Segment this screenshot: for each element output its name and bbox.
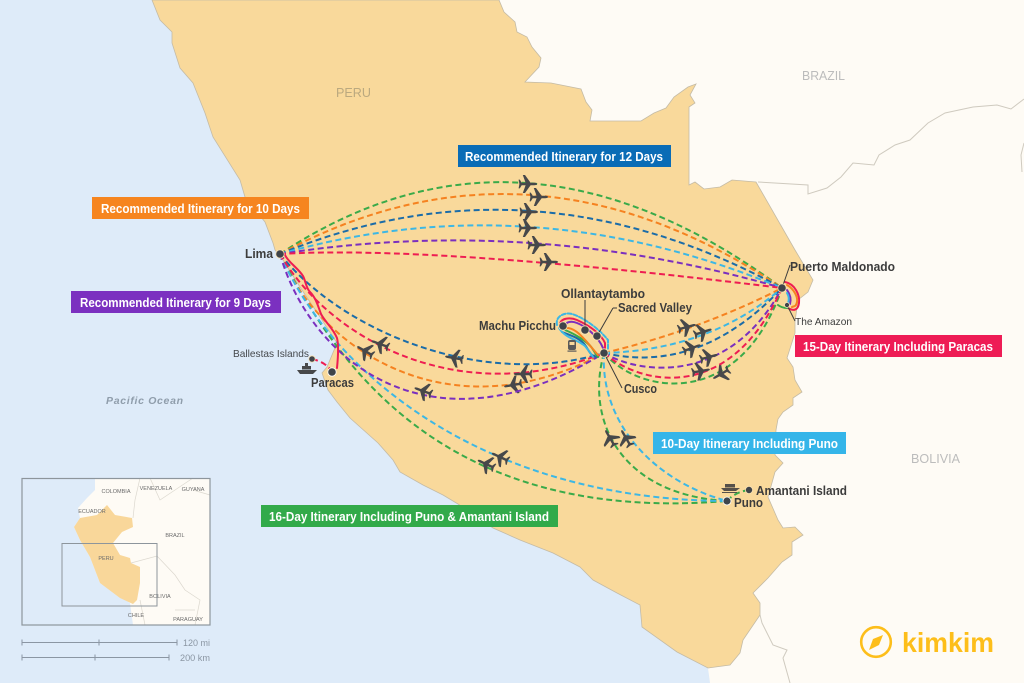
marker: Ollantaytambo: [581, 326, 589, 334]
scale bars: 200 km: [180, 653, 210, 664]
leader lines: [585, 265, 795, 388]
map markers: [276, 250, 790, 505]
legend tag: 15-Day Paracas: [795, 335, 1002, 357]
route: 9 Days (purple): [280, 236, 782, 403]
place: Paracas: Paracas: [311, 376, 354, 390]
scale bars: 120 mi: [183, 638, 210, 649]
legend tag: 10 Days: [92, 197, 309, 219]
route: 12 Days (dark blue): [280, 203, 782, 368]
inset locator map: BOLIVIA: [149, 594, 171, 600]
icon: boat near Amantani: [721, 484, 740, 493]
place labels: [233, 247, 895, 510]
marker: Ballestas Islands: [309, 356, 315, 362]
marker: Lima: [276, 250, 284, 258]
inset locator map: CHILE: [128, 613, 144, 619]
inset locator map: GUYANA: [182, 487, 205, 493]
place: Machu Picchu: Machu Picchu: [479, 319, 556, 333]
legend tag: 10-Day Puno: 10-Day Itinerary Including Puno: [661, 437, 838, 451]
icon: planes: [368, 253, 711, 383]
marker: Sacred Valley: [593, 332, 601, 340]
route: 15-Day including Paracas (red): [280, 252, 782, 383]
label: Pacific Ocean: Pacific Ocean: [106, 395, 183, 407]
legend tag: 16-Day Puno and Amantani: 16-Day Itinerary Including Puno & Amantani Island: [269, 510, 549, 524]
logo: kimkim: kimkim: [902, 627, 994, 658]
place: Lima: Lima: [245, 247, 274, 261]
icon: planes: [353, 188, 698, 395]
inset locator map: PARAGUAY: [173, 617, 203, 623]
logo: kimkim: [861, 627, 994, 658]
marker: Paracas: [328, 368, 336, 376]
overland bundle: Puerto Maldonado to The Amazon: [778, 282, 799, 310]
route: 16-Day including Puno and Amantani (green): [280, 175, 782, 503]
place: Puerto Maldonado: Puerto Maldonado: [790, 260, 895, 274]
place: Cusco: Cusco: [624, 382, 657, 396]
inset locator map: COLOMBIA: [101, 489, 131, 495]
legend tag: 15-Day Paracas: 15-Day Itinerary Including Paracas: [803, 340, 993, 354]
icon: planes: [474, 175, 734, 476]
legend tag: 9 Days: Recommended Itinerary for 9 Days: [80, 296, 271, 310]
place: Ollantaytambo: Ollantaytambo: [561, 287, 645, 301]
inset locator map: BRAZIL: [165, 533, 185, 539]
inset locator map: VENEZUELA: [140, 486, 173, 492]
inset locator map: ECUADOR: [78, 509, 106, 515]
legend tag: 12 Days: Recommended Itinerary for 12 Days: [465, 150, 663, 164]
scale bars: [22, 638, 210, 664]
marker: Cusco: [600, 349, 608, 357]
legend tag: 9 Days: [71, 291, 281, 313]
marker: Puno: [723, 497, 731, 505]
place: Ballestas Islands: Ballestas Islands: [233, 348, 309, 360]
marker: Amantani Island: [745, 486, 753, 494]
place: Puno: Puno: [734, 496, 763, 510]
map: Pacific Ocean: [0, 0, 710, 683]
route: 10-Day including Puno (cyan): [280, 219, 782, 501]
map: Peru: [152, 0, 813, 668]
map: country borders: [758, 99, 1024, 683]
marker: Machu Picchu: [559, 322, 567, 330]
icon: ship near Ballestas: [297, 363, 317, 374]
marker: The Amazon: [784, 302, 790, 308]
inset locator map: PERU: [98, 556, 114, 562]
icon: planes: [444, 203, 704, 368]
country label: Peru: PERU: [336, 85, 371, 100]
country label: Bolivia: BOLIVIA: [911, 451, 960, 466]
overland bundle: Cusco to Machu Picchu: [557, 313, 608, 357]
place: The Amazon: The Amazon: [795, 316, 852, 328]
icon: planes: [411, 236, 720, 403]
country label: Brazil: BRAZIL: [802, 68, 845, 83]
place: Sacred Valley: Sacred Valley: [618, 301, 692, 315]
icon: planes: [488, 219, 714, 469]
marker: Puerto Maldonado: [778, 284, 786, 292]
red overland link Lima to Paracas: [285, 255, 338, 368]
legend tag: 10 Days: Recommended Itinerary for 10 Days: [101, 202, 300, 216]
legend tag: 12 Days: [458, 145, 671, 167]
legend tag: 10-Day Puno: [653, 432, 846, 454]
icon: train: [568, 340, 576, 352]
inset locator map: [22, 478, 210, 625]
legend tag: 16-Day Puno and Amantani: [261, 505, 558, 527]
route: 10 Days (orange): [280, 188, 782, 395]
place: Amantani Island: Amantani Island: [756, 484, 847, 498]
